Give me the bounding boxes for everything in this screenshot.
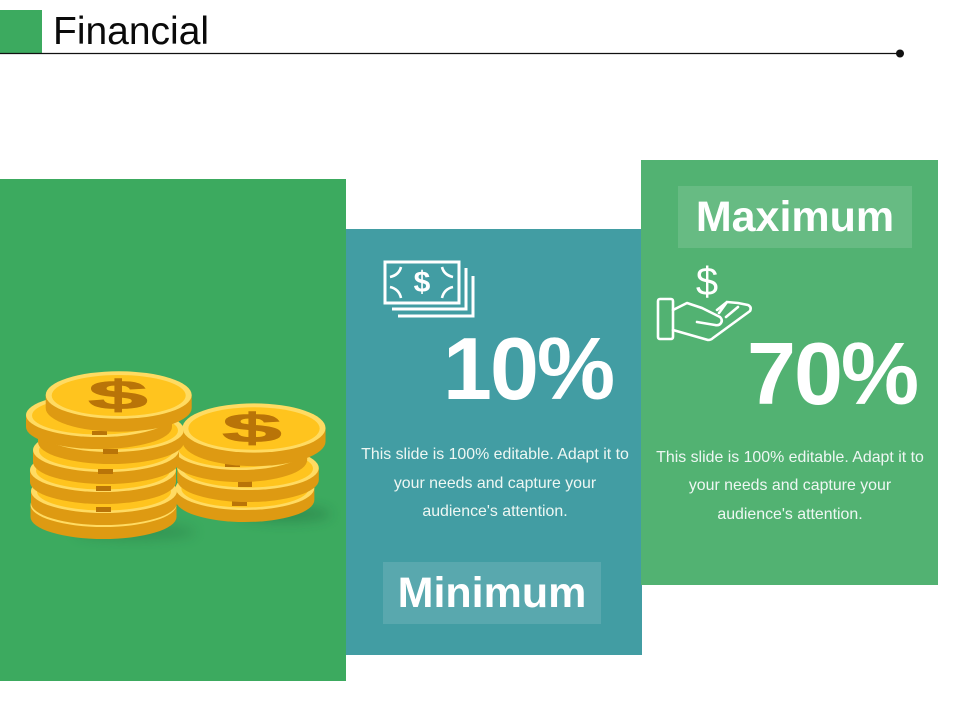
icon: stacks of gold coins: $ <box>222 406 282 451</box>
icon: hand with dollar <box>656 260 752 342</box>
label: minimum: Minimum <box>398 569 586 617</box>
header rule with dot <box>0 50 904 58</box>
header accent square <box>0 10 42 53</box>
label: minimum <box>383 562 601 624</box>
big number: 70% <box>747 324 917 423</box>
description: audience's attention. <box>422 503 568 520</box>
icon: stacks of gold coins <box>26 371 328 542</box>
right stack <box>176 466 314 522</box>
description: This slide is 100% editable. Adapt it to <box>361 446 629 463</box>
big number: 10% <box>443 319 613 418</box>
panel: coins <box>0 179 346 681</box>
description: your needs and capture your <box>689 477 891 494</box>
icon: hand with dollar: $ <box>696 260 718 304</box>
description <box>361 446 629 520</box>
icon: stacks of gold coins: $ <box>88 373 148 418</box>
description <box>656 448 924 523</box>
panel: minimum <box>346 229 642 655</box>
panel: maximum <box>641 160 938 585</box>
label: maximum <box>678 186 912 248</box>
icon: banknotes: $ <box>414 266 431 299</box>
title: Financial <box>53 10 209 53</box>
label: maximum: Maximum <box>696 193 894 241</box>
description: your needs and capture your <box>394 475 596 492</box>
description: audience's attention. <box>717 506 863 523</box>
icon: banknotes <box>384 260 474 318</box>
left stack <box>30 483 176 539</box>
description: This slide is 100% editable. Adapt it to <box>656 448 924 466</box>
